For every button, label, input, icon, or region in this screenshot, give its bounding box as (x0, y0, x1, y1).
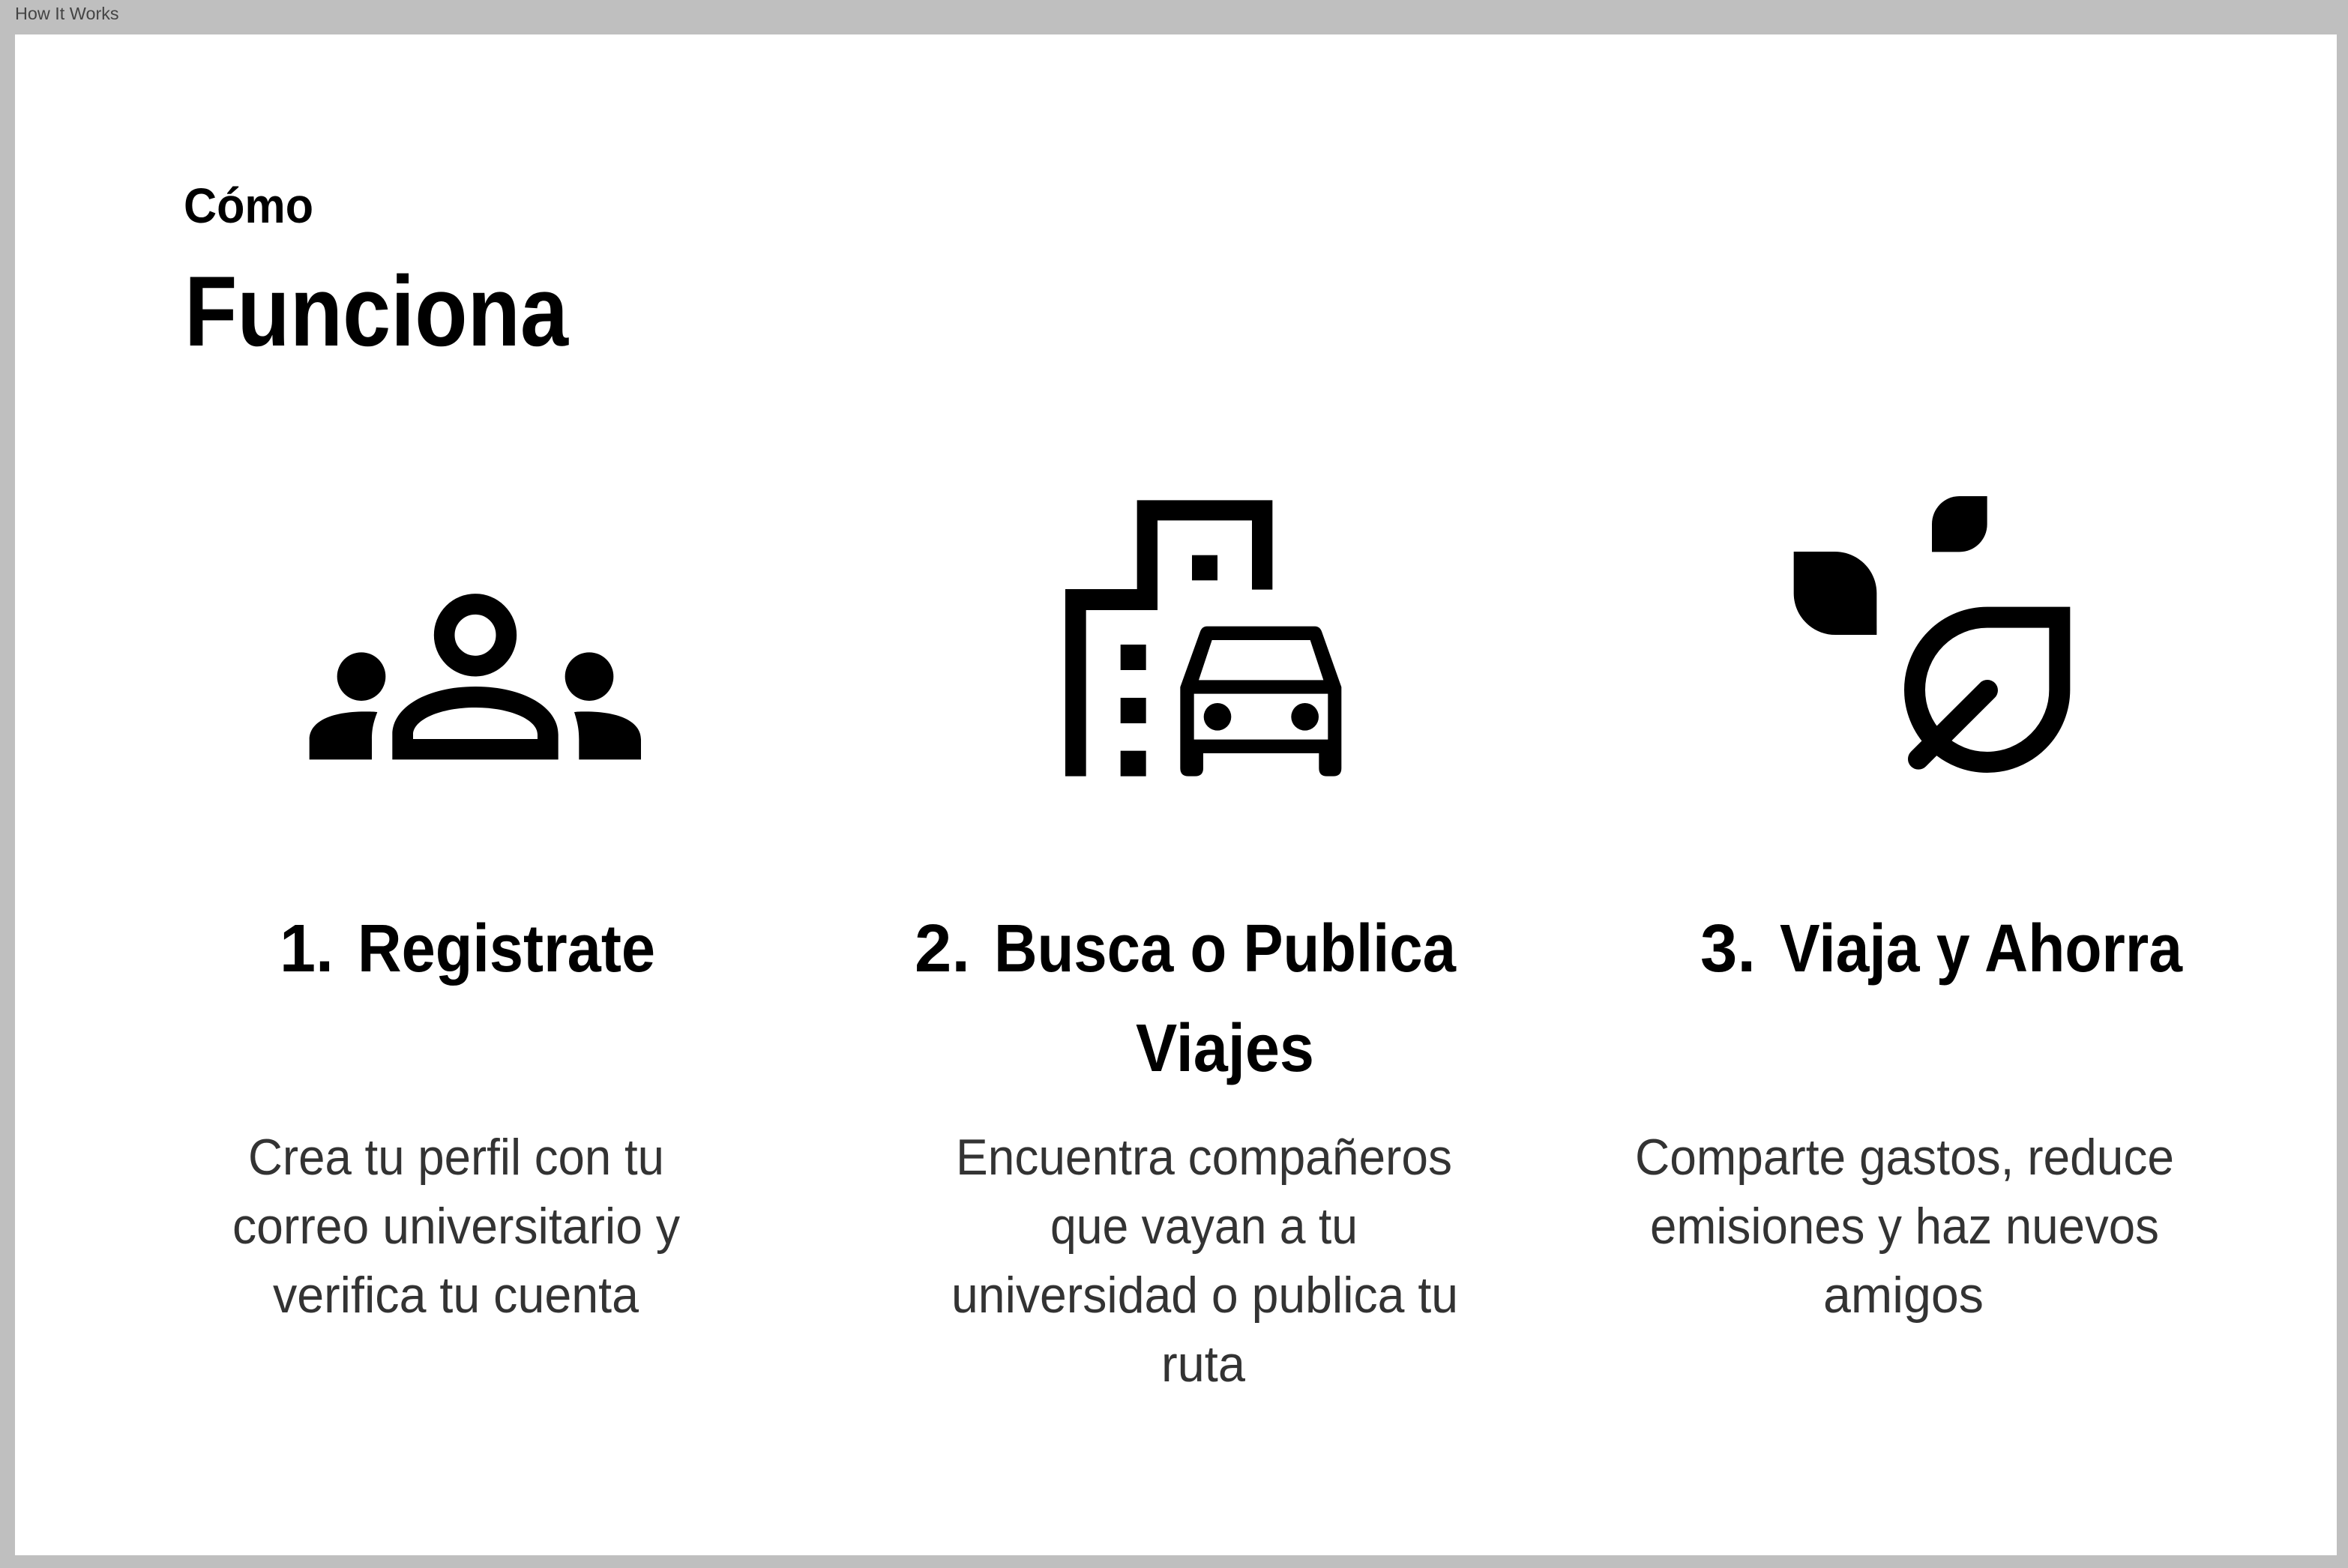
step heading: 1. (280, 911, 334, 986)
icon: leaves (1794, 496, 2059, 762)
step description: ruta (1161, 1336, 1245, 1393)
step description: que vayan a tu (1050, 1198, 1358, 1255)
step description: emisiones y haz nuevos (1650, 1198, 2159, 1255)
step description: verifica tu cuenta (273, 1267, 639, 1324)
panel: step 3 (1635, 496, 2183, 1324)
step heading: Viaja y Ahorra (1780, 911, 2183, 986)
title line: Funciona: Funciona (184, 256, 569, 367)
icon: building and car (1065, 500, 1341, 777)
step heading: 3. (1700, 911, 1756, 986)
panel: step 2 (915, 500, 1458, 1393)
step heading (915, 911, 1457, 1086)
step heading: Viajes (1136, 1011, 1314, 1086)
step description: correo universitario y (232, 1198, 680, 1255)
step heading: Busca o Publica (994, 911, 1457, 986)
step description: Encuentra compañeros (956, 1129, 1452, 1186)
step description (951, 1129, 1458, 1393)
frame label: How It Works (15, 4, 119, 23)
icon: group of people (310, 604, 641, 759)
step description (232, 1129, 680, 1324)
step heading: Registrate (358, 911, 655, 986)
step description: Crea tu perfil con tu (248, 1129, 664, 1186)
step description (1635, 1129, 2174, 1324)
step description: amigos (1823, 1267, 1984, 1324)
panel: step 1 (232, 604, 680, 1324)
step description: universidad o publica tu (951, 1267, 1458, 1324)
step heading: 2. (915, 911, 970, 986)
title (184, 178, 569, 367)
title line: Cómo: Cómo (184, 178, 313, 233)
step description: Comparte gastos, reduce (1635, 1129, 2174, 1186)
